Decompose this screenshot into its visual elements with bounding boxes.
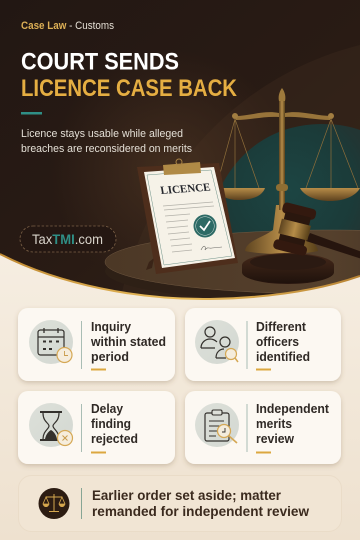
brand pill: TaxTMI.com <box>32 232 103 247</box>
card: independent merits review <box>185 391 341 464</box>
subtitle: Licence stays usable while alleged <box>21 128 183 140</box>
card text: within stated <box>90 335 166 349</box>
conclusion text: remanded for independent review <box>92 503 309 519</box>
icon: approval seal <box>194 214 216 238</box>
card: delay finding rejected <box>18 391 175 464</box>
card text: Independent <box>256 402 330 416</box>
table <box>104 230 360 294</box>
card: inquiry within stated period <box>18 308 175 381</box>
card text: Different <box>256 320 307 334</box>
conclusion text: Earlier order set aside; matter <box>92 487 282 503</box>
icon: scales of justice <box>214 88 360 254</box>
icon: two people with magnifier <box>195 320 239 364</box>
card: different officers identified <box>185 308 341 381</box>
icon: hourglass with cross <box>29 403 73 447</box>
card text: Delay <box>91 402 123 416</box>
brand pill <box>20 226 116 252</box>
card text: rejected <box>91 432 138 446</box>
card text <box>90 320 166 364</box>
icon: calendar with clock <box>29 320 73 364</box>
title accent <box>21 112 42 114</box>
card text: period <box>91 350 129 364</box>
subtitle <box>21 128 192 155</box>
card text: merits <box>256 417 292 431</box>
clipboard with licence document <box>137 159 238 274</box>
icon: clipboard with magnifier <box>195 403 239 447</box>
licence heading: LICENCE <box>159 182 212 197</box>
title: LICENCE CASE BACK <box>21 75 237 102</box>
conclusion text <box>92 487 309 519</box>
card text: review <box>256 432 294 446</box>
hero curve edge <box>0 254 360 299</box>
category label: Case Law - Customs <box>21 20 114 32</box>
conclusion banner <box>18 476 342 532</box>
card text: Inquiry <box>91 320 131 334</box>
title <box>21 48 237 102</box>
card text <box>256 402 330 446</box>
icon: gavel <box>242 202 360 284</box>
card text <box>91 402 138 446</box>
icon: scales badge <box>38 488 70 519</box>
card text: identified <box>256 350 310 364</box>
hero panel <box>0 0 360 303</box>
card text: officers <box>256 335 299 349</box>
title: COURT SENDS <box>21 48 179 76</box>
card text: finding <box>91 417 131 431</box>
card text <box>256 320 310 364</box>
subtitle: breaches are reconsidered on merits <box>21 143 192 155</box>
